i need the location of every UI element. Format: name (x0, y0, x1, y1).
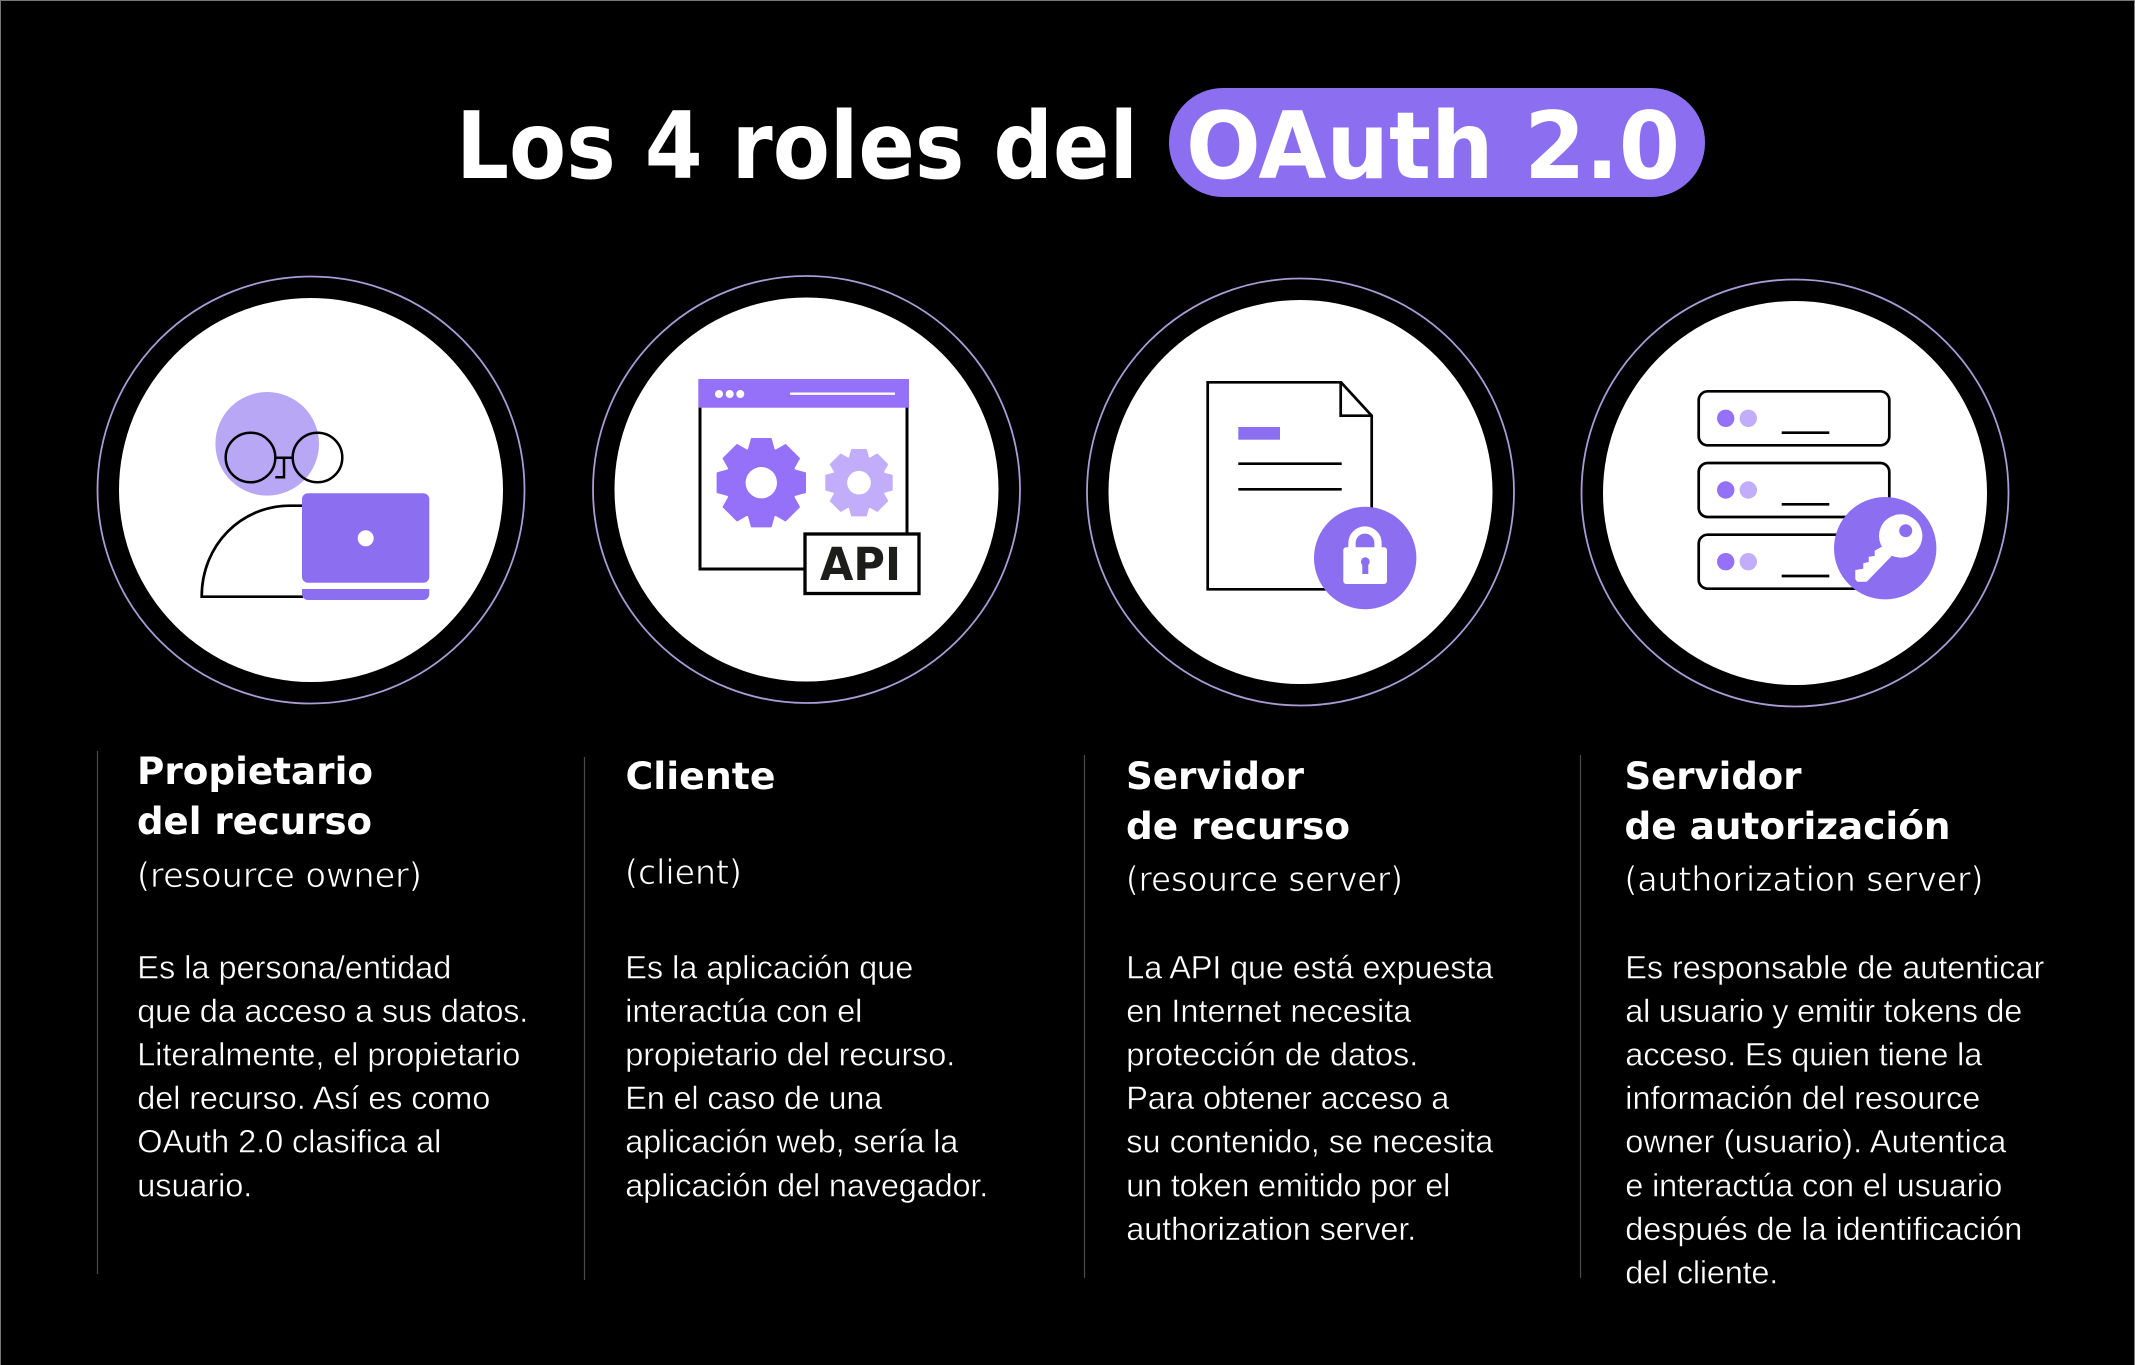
description: en Internet necesita (1126, 993, 1412, 1029)
description: del cliente. (1625, 1254, 1778, 1290)
heading: de recurso (1126, 805, 1350, 848)
description: interactúa con el (625, 993, 862, 1029)
description (137, 949, 528, 1203)
heading: Servidor (1126, 755, 1305, 798)
subtitle: (client) (625, 853, 742, 893)
icon: server racks with key (1582, 280, 2008, 706)
description: Es la aplicación que (625, 949, 913, 985)
heading: Propietario (137, 750, 373, 793)
heading (1126, 755, 1350, 848)
title (456, 88, 1705, 200)
separator line (1084, 755, 1086, 1278)
description: Literalmente, el propietario (137, 1036, 520, 1072)
description: información del resource (1625, 1080, 1980, 1116)
panel: servidor de recurso (1084, 278, 1514, 1278)
panel: cliente (584, 276, 1020, 1280)
subtitle: (authorization server) (1624, 860, 1984, 900)
description: del recurso. Así es como (137, 1080, 490, 1116)
heading (137, 750, 373, 843)
separator line (1580, 755, 1582, 1278)
heading: del recurso (137, 800, 372, 843)
description: En el caso de una (625, 1080, 883, 1116)
description: protección de datos. (1126, 1036, 1418, 1072)
description: usuario. (137, 1167, 252, 1203)
description: Es responsable de autenticar (1625, 949, 2044, 985)
icon: browser window with gears and API: API (820, 538, 901, 591)
title: Los 4 roles del (456, 92, 1138, 200)
description: owner (usuario). Autentica (1625, 1124, 2007, 1160)
description (1625, 949, 2044, 1290)
separator line (96, 751, 98, 1274)
subtitle: (resource server) (1126, 860, 1403, 900)
description: e interactúa con el usuario (1625, 1167, 2002, 1203)
heading: Cliente (626, 755, 776, 798)
separator line (584, 757, 586, 1280)
description: Para obtener acceso a (1126, 1080, 1450, 1116)
description: acceso. Es quien tiene la (1625, 1036, 1983, 1072)
description: OAuth 2.0 clasifica al (137, 1124, 441, 1160)
description (1126, 949, 1494, 1247)
description: un token emitido por el (1126, 1167, 1450, 1203)
description (625, 949, 988, 1203)
description: Es la persona/entidad (137, 949, 451, 985)
description: al usuario y emitir tokens de (1625, 993, 2022, 1029)
icon: person with laptop (98, 276, 524, 704)
heading: de autorización (1624, 805, 1950, 848)
title pill: OAuth 2.0: OAuth 2.0 (1186, 92, 1680, 200)
panel: servidor de autorización (1580, 280, 2044, 1290)
subtitle: (resource owner) (137, 856, 422, 896)
heading: Servidor (1624, 755, 1802, 798)
icon: browser window with gears and API (593, 276, 1020, 703)
panel: propietario del recurso (98, 276, 528, 1274)
description: aplicación web, sería la (625, 1124, 959, 1160)
description: que da acceso a sus datos. (137, 993, 528, 1029)
description: propietario del recurso. (625, 1036, 955, 1072)
icon: document with padlock (1087, 278, 1514, 706)
description: su contenido, se necesita (1126, 1124, 1494, 1160)
description: authorization server. (1126, 1211, 1416, 1247)
heading (1624, 755, 1950, 848)
description: La API que está expuesta (1126, 949, 1494, 985)
description: aplicación del navegador. (625, 1167, 988, 1203)
description: después de la identificación (1625, 1211, 2022, 1247)
